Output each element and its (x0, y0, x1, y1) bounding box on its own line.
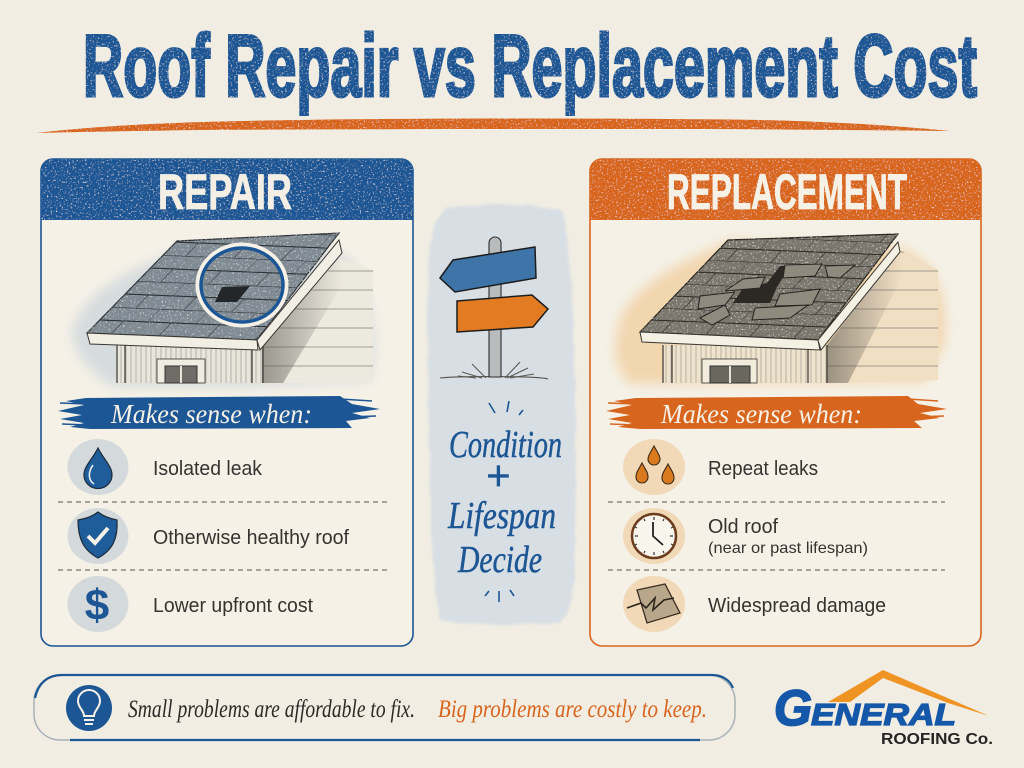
text: condition plus lifespan decide: + (484, 454, 512, 500)
icon: shield with check (68, 508, 128, 564)
text: condition plus lifespan decide: Lifespan (447, 495, 556, 537)
text: old roof: Old roof (708, 516, 778, 538)
icon: signpost (440, 237, 548, 379)
row: repeat leaks: Repeat leaks (708, 458, 818, 480)
icon: clock (623, 508, 685, 564)
row: otherwise healthy roof (68, 508, 349, 564)
row: old roof (623, 508, 868, 564)
row: widespread damage (623, 576, 886, 632)
row: repeat leaks (623, 439, 818, 495)
logo roof mark (828, 670, 989, 716)
logo: general roofing co (774, 670, 993, 748)
pale blue backdrop (428, 204, 576, 625)
icon: water drop (68, 439, 128, 495)
burst marks above text (489, 401, 523, 415)
text: near or past lifespan: (near or past lifespan) (708, 540, 868, 557)
text: big problems: Big problems are costly to keep. (438, 696, 707, 723)
banner: makes sense when: Makes sense when: (110, 399, 312, 429)
row: isolated leak (68, 439, 263, 495)
burst marks below text (485, 590, 514, 602)
callout top and bottom strokes (35, 675, 733, 740)
text: condition plus lifespan decide: Decide (457, 539, 542, 581)
row: otherwise healthy roof: Otherwise healthy roof (153, 527, 349, 549)
banner: makes sense when: Makes sense when: (660, 399, 862, 429)
icon: light bulb (66, 685, 112, 731)
logo wordmark remainder: ENERAL (811, 697, 956, 732)
icon: cracked shingle (623, 576, 685, 632)
title underline brush stroke (36, 118, 950, 133)
text: condition plus lifespan decide: Condition (449, 424, 562, 466)
callout: takeaway (34, 675, 735, 740)
icon: three drops (623, 439, 685, 495)
row: lower upfront cost: Lower upfront cost (153, 595, 313, 617)
callout border (34, 675, 735, 740)
text: small problems: Small problems are affordable to fix. (128, 696, 415, 723)
logo wordmark: G (774, 680, 812, 736)
banner: makes sense when (58, 396, 380, 429)
text: condition plus lifespan decide (447, 424, 562, 581)
panel: repair (41, 159, 413, 646)
panel body (590, 159, 981, 646)
panel header (590, 159, 981, 220)
row: widespread damage: Widespread damage (708, 595, 886, 617)
banner: makes sense when (606, 396, 947, 429)
illustration: roof with isolated damage (72, 233, 373, 386)
heading: repair: REPAIR (158, 164, 292, 220)
icon: dollar sign: $ (85, 581, 109, 630)
row: lower upfront cost (68, 576, 313, 632)
logo subline: ROOFING Co. (881, 731, 993, 748)
row: isolated leak: Isolated leak (153, 458, 263, 480)
panel header (41, 159, 413, 220)
panel: replacement (590, 159, 981, 646)
illustration: roof with widespread damage (615, 234, 945, 384)
icon: dollar sign (68, 576, 128, 632)
panel: signpost and decision (428, 204, 576, 625)
panel body (41, 159, 413, 646)
